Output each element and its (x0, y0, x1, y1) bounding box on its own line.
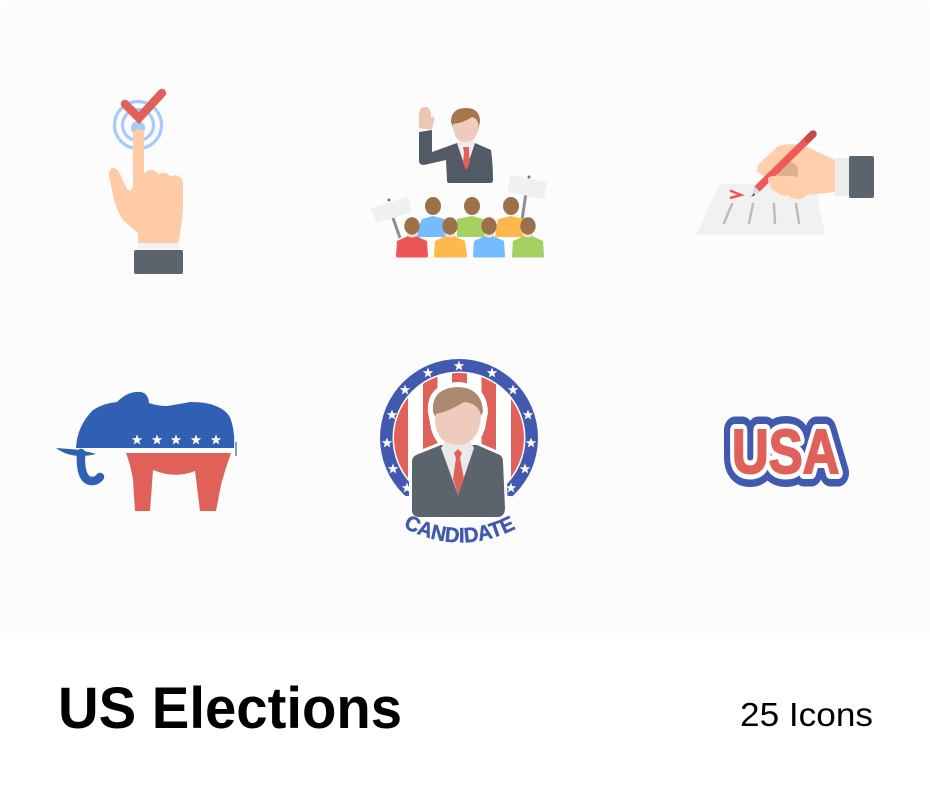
label: CANDIDATE (403, 527, 519, 542)
tusk (56, 448, 96, 456)
shirt cuff (138, 243, 180, 250)
ballot paper (696, 184, 825, 235)
crowd back row (417, 197, 524, 237)
white inner (392, 372, 526, 504)
palm shadow (778, 161, 798, 177)
ballot mark (730, 190, 741, 198)
writing hand (757, 144, 835, 199)
icon: candidate badge: CANDIDATE (406, 516, 516, 543)
star ring (380, 359, 538, 517)
thumb (768, 176, 808, 192)
candidate figure (412, 387, 505, 517)
placard right (508, 175, 547, 220)
icon count: 25 Icons (740, 696, 873, 733)
tail (235, 442, 237, 456)
ballot lines (724, 204, 799, 223)
pencil (751, 134, 813, 197)
icon: Republican elephant (56, 392, 236, 511)
icon: USA sticker: USA (732, 418, 839, 487)
sleeve (849, 156, 874, 198)
hand (109, 129, 183, 243)
title: US Elections (58, 676, 402, 741)
infographic canvas (56, 88, 874, 728)
red stripes (394, 373, 524, 478)
checkmark (125, 93, 162, 118)
placard left (371, 197, 412, 238)
icon: hand tapping a checkmark (109, 93, 183, 274)
ring stars (382, 360, 536, 492)
icon: hand marking a ballot (696, 134, 874, 235)
icon: USA sticker: USA (732, 418, 839, 487)
icon: candidate badge (380, 359, 538, 543)
speaker (419, 107, 493, 183)
white cut-out below ring (406, 496, 512, 528)
stars (132, 434, 221, 444)
signal rings (114, 102, 162, 148)
icon: USA sticker: USA (732, 418, 839, 487)
trunk (81, 453, 100, 481)
legs (126, 453, 231, 511)
sleeve (134, 250, 183, 274)
crowd front row (396, 217, 544, 258)
icon: candidate addressing a crowd (371, 107, 547, 258)
cuff (835, 158, 850, 196)
body (76, 392, 234, 448)
